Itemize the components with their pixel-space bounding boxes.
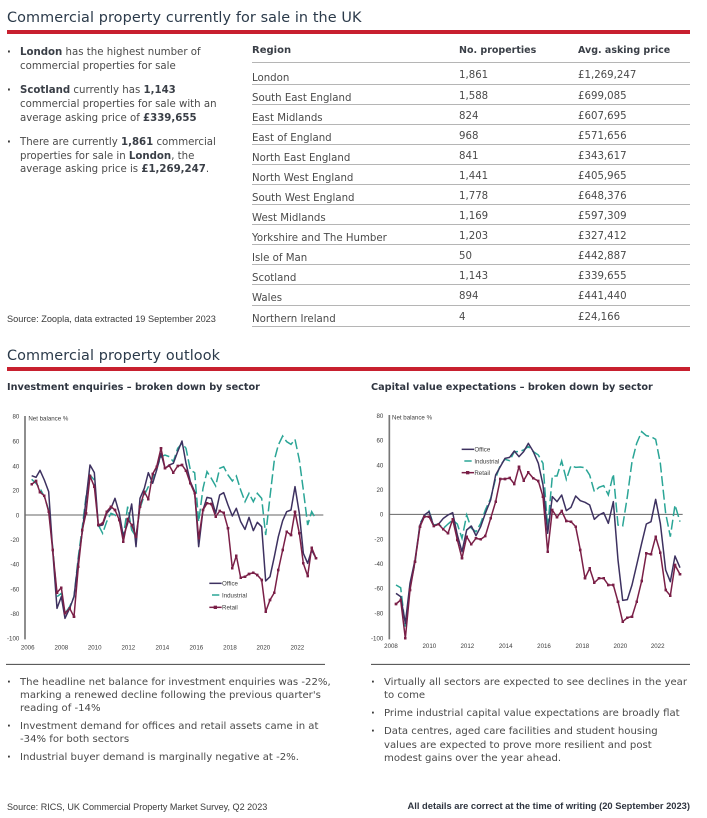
chart: investment enquiries: 20	[12, 488, 20, 495]
red heading rule	[7, 30, 690, 34]
chart: capital value expectations: 2012	[460, 643, 475, 650]
text block: key facts: commercial properties for sale	[20, 61, 176, 72]
table: regions: £441,440	[578, 291, 627, 302]
chart: investment enquiries: -40	[10, 562, 20, 569]
text block: key facts: ·	[7, 137, 11, 148]
disclaimer: All details are correct at the time of writing (20 September 2023)	[408, 801, 690, 811]
text block: investment commentary: Investment demand for offices and retail assets came in at	[20, 721, 318, 732]
table: regions: Yorkshire and The Humber	[252, 233, 387, 244]
table: regions: £442,887	[578, 250, 627, 262]
table: regions: 1,441	[459, 170, 488, 182]
chart: investment enquiries: 2020	[256, 644, 271, 651]
text block: capital value commentary: ·	[371, 676, 375, 688]
text block: key facts: There are currently 1,861 commercial	[20, 137, 216, 148]
table: regions: £1,269,247	[578, 70, 636, 81]
chart: investment enquiries: -100	[7, 635, 20, 642]
table: regions: South West England	[252, 193, 354, 204]
table: regions: East Midlands	[252, 113, 323, 124]
table: regions: North West England	[252, 173, 353, 184]
text block: capital value commentary: Data centres, aged care facilities and student housing	[384, 726, 658, 737]
chart: capital value expectations: 2022	[651, 643, 665, 650]
text block: investment commentary: The headline net balance for investment enquiries was -22%,	[20, 677, 331, 688]
chart: capital value expectations: Retail	[474, 470, 490, 477]
chart: capital value expectations: 80	[376, 413, 384, 420]
text block: capital value commentary: ·	[371, 708, 375, 719]
table: regions: £339,655	[578, 270, 627, 282]
table: regions: 1,588	[459, 90, 488, 102]
text block: investment commentary	[7, 677, 331, 763]
text block: capital value commentary: ·	[371, 726, 375, 737]
table: regions: 4	[459, 312, 465, 322]
text block: investment commentary: -34% for both sectors	[20, 734, 129, 745]
text block: capital value commentary: to come	[384, 690, 425, 701]
text block: investment commentary: ·	[7, 677, 11, 688]
chart: investment enquiries: Retail	[222, 605, 238, 612]
chart: capital value expectations: Office	[474, 447, 491, 454]
chart: capital value expectations: -40	[374, 561, 384, 568]
text block: investment commentary: ·	[7, 721, 11, 732]
table: regions: West Midlands	[252, 213, 326, 224]
chart: capital value expectations: 60	[376, 438, 384, 445]
text block: investment commentary: Industrial buyer demand is marginally negative at -2%.	[20, 752, 299, 763]
table: regions: Region	[252, 45, 291, 56]
table: regions: 1,861	[459, 70, 488, 81]
text block: investment commentary: reading of -14%	[20, 703, 101, 714]
table: regions: 1,778	[459, 190, 488, 202]
text block: capital value commentary: modest gains over the year ahead.	[384, 753, 561, 764]
table: regions: 1,203	[459, 230, 488, 242]
chart: investment enquiries: 2010	[88, 644, 102, 651]
chart: investment enquiries: -60	[10, 586, 20, 593]
chart: capital value expectations: 2014	[499, 643, 513, 650]
text block: capital value commentary	[371, 676, 688, 764]
chart: capital value expectations: 2018	[575, 643, 590, 650]
table: regions: £405,965	[578, 170, 627, 182]
table: regions: £597,309	[578, 210, 627, 222]
text block: key facts: ·	[7, 85, 11, 96]
chart: capital value expectations: -80	[374, 610, 384, 617]
table: regions: 1,169	[459, 210, 488, 222]
subheading: capital value expectations: Capital value expectations – broken down by sector	[371, 382, 653, 393]
chart: investment enquiries: Industrial	[222, 592, 247, 599]
table: regions: Wales	[252, 293, 282, 304]
chart: investment enquiries	[6, 414, 325, 665]
text block: capital value commentary: values are expected to prove more resilient and post	[384, 740, 652, 750]
heading: commercial property outlook: Commercial property outlook	[7, 348, 220, 364]
chart: capital value expectations: 2008	[384, 643, 398, 650]
table: regions: Scotland	[252, 273, 296, 284]
chart: investment enquiries: 60	[12, 438, 20, 445]
table: regions: Isle of Man	[252, 253, 307, 264]
title: commercial property for sale: Commercial property currently for sale in the UK	[7, 10, 362, 26]
text block: key facts	[7, 47, 217, 175]
chart: capital value expectations: 20	[376, 487, 384, 494]
chart: investment enquiries: -80	[10, 611, 20, 618]
chart: capital value expectations: 40	[376, 463, 384, 470]
table: regions: £648,376	[578, 190, 627, 202]
table: regions: No. properties	[459, 45, 536, 56]
table: regions: 841	[459, 150, 478, 162]
table: regions: 824	[459, 110, 478, 122]
table: regions: 968	[459, 130, 478, 142]
chart: investment enquiries: 2008	[54, 644, 69, 651]
text block: key facts: commercial properties for sale with an	[20, 99, 217, 110]
table: regions: London	[252, 72, 289, 84]
text block: key facts: average asking price of £339,655	[20, 113, 197, 124]
chart: capital value expectations: Industrial	[474, 458, 499, 465]
chart: investment enquiries: 40	[12, 464, 20, 471]
text block: capital value commentary: Virtually all sectors are expected to see declines in the year	[384, 676, 687, 688]
subheading: investment enquiries: Investment enquiries – broken down by sector	[7, 382, 260, 393]
chart: capital value expectations: -20	[374, 536, 384, 543]
table: regions: East of England	[252, 133, 332, 144]
table: regions: £571,656	[578, 130, 627, 142]
text block: investment commentary: ·	[7, 752, 11, 763]
chart: investment enquiries: 2014	[155, 644, 170, 651]
chart: investment enquiries: 2022	[290, 644, 305, 651]
chart: investment enquiries: 2006	[21, 644, 35, 651]
table: regions	[252, 45, 690, 327]
source note: Zoopla: Source: Zoopla, data extracted 19 September 2023	[7, 314, 216, 324]
table: regions: 894	[459, 291, 478, 302]
chart: investment enquiries: 2016	[189, 644, 204, 651]
chart: investment enquiries: Net balance %	[28, 416, 69, 423]
chart: investment enquiries: 2012	[121, 644, 136, 651]
text block: key facts: average asking price is £1,269,247.	[20, 164, 209, 175]
text block: key facts: ·	[7, 47, 11, 58]
table: regions: £607,695	[578, 110, 627, 122]
table: regions: Northern Ireland	[252, 314, 336, 325]
text block: key facts: Scotland currently has 1,143	[20, 85, 176, 96]
table: regions: £699,085	[578, 90, 627, 102]
table: regions: 50	[459, 250, 472, 262]
text block: capital value commentary: Prime industrial capital value expectations are broadly flat	[384, 708, 680, 719]
chart: investment enquiries: -20	[10, 537, 20, 544]
chart: capital value expectations: 0	[380, 512, 384, 519]
chart: capital value expectations: -60	[374, 586, 384, 593]
chart: investment enquiries: 80	[12, 414, 20, 421]
red heading rule	[7, 367, 690, 371]
text block: investment commentary: marking a renewed decline following the previous quarter's	[20, 690, 321, 701]
table: regions: Avg. asking price	[578, 45, 670, 56]
chart: capital value expectations: 2016	[537, 643, 551, 650]
source note: RICS: Source: RICS, UK Commercial Property Market Survey, Q2 2023	[7, 802, 267, 812]
table: regions: 1,143	[459, 270, 488, 282]
chart: capital value expectations	[371, 413, 690, 665]
chart: investment enquiries: 2018	[223, 644, 237, 651]
chart: capital value expectations: 2020	[613, 643, 628, 650]
table: regions: £24,166	[578, 312, 620, 322]
chart: investment enquiries: Office	[222, 581, 239, 588]
table: regions: North East England	[252, 153, 350, 164]
table: regions: South East England	[252, 93, 351, 104]
text block: key facts: London has the highest number of	[20, 47, 201, 58]
text block: key facts: properties for sale in London, the	[20, 151, 194, 162]
chart: capital value expectations: Net balance %	[392, 414, 433, 421]
chart: investment enquiries: 0	[16, 512, 20, 519]
chart: capital value expectations: 2010	[422, 643, 437, 650]
table: regions: £343,617	[578, 150, 627, 162]
table: regions: £327,412	[578, 230, 627, 242]
chart: capital value expectations: -100	[371, 635, 384, 642]
